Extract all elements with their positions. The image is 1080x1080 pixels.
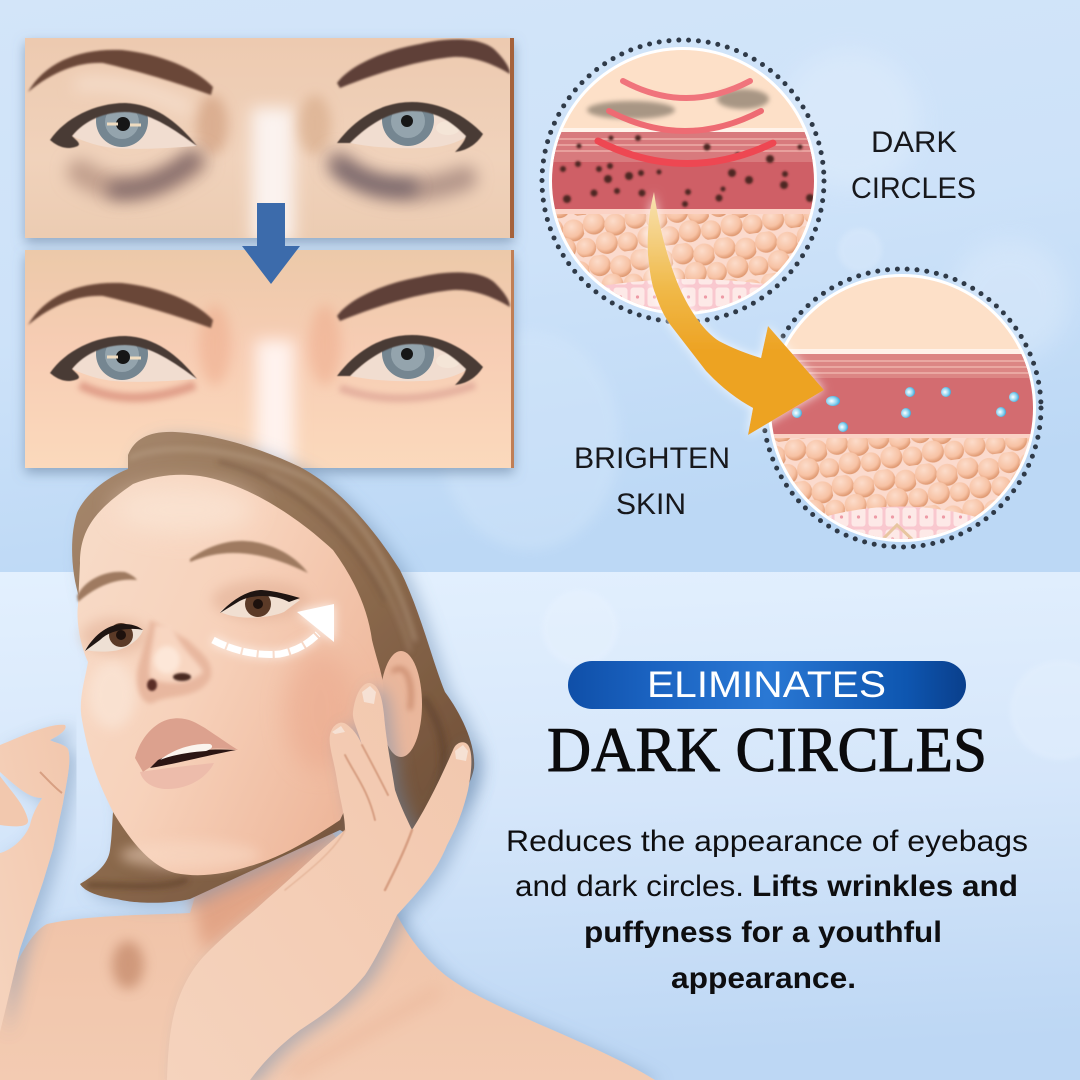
label: brighten skin: SKIN: [616, 488, 686, 521]
badge: eliminates: [568, 661, 966, 709]
circle: brightened skin: [768, 274, 1036, 545]
heading: dark circles: DARK CIRCLES: [547, 715, 987, 785]
pigment specks: [560, 135, 814, 207]
face: [77, 475, 383, 875]
dark pigment patches: [587, 89, 769, 119]
label: brighten skin: [574, 442, 730, 521]
text block: description: Lifts wrinkles and: [752, 870, 1018, 903]
text block: description: puffyness for a youthful: [584, 916, 942, 949]
text block: description: [506, 825, 1028, 995]
text block: description: and dark circles.: [515, 870, 744, 903]
photo: woman touching her face: [0, 432, 655, 1080]
nose: [137, 620, 211, 703]
arrow: blue down arrow between photos: [242, 203, 300, 284]
blue drops: [792, 387, 1019, 432]
text block: description: appearance.: [671, 962, 856, 995]
arrow: white dashed lift arrow: [213, 604, 334, 654]
right hand: [167, 683, 471, 1080]
label: brighten skin: BRIGHTEN: [574, 442, 730, 475]
background: upper panel: [0, 0, 1080, 572]
eyes and brows: [77, 541, 308, 654]
dotted ring: bottom circle: [763, 269, 1041, 547]
ear: [380, 651, 422, 757]
label: dark circles: DARK: [871, 126, 957, 159]
photo: before, eyes with dark circles: [25, 38, 514, 243]
dotted ring: top circle: [542, 40, 824, 322]
text block: description: Reduces the appearance of eyebags: [506, 825, 1028, 858]
badge: eliminates: ELIMINATES: [647, 664, 886, 705]
red wave lines: [598, 81, 773, 164]
label: dark circles: [851, 126, 976, 205]
label: dark circles: CIRCLES: [851, 172, 976, 205]
arrow: orange curved arrow: [648, 192, 824, 435]
body and shoulders: [0, 830, 655, 1080]
background: lower panel: [0, 572, 1080, 1080]
left hand: [0, 725, 69, 1032]
hair: [72, 432, 474, 903]
circle: skin with dark circles: [549, 47, 817, 320]
lips: [135, 718, 238, 789]
photo: after, eyes brightened: [25, 250, 514, 470]
